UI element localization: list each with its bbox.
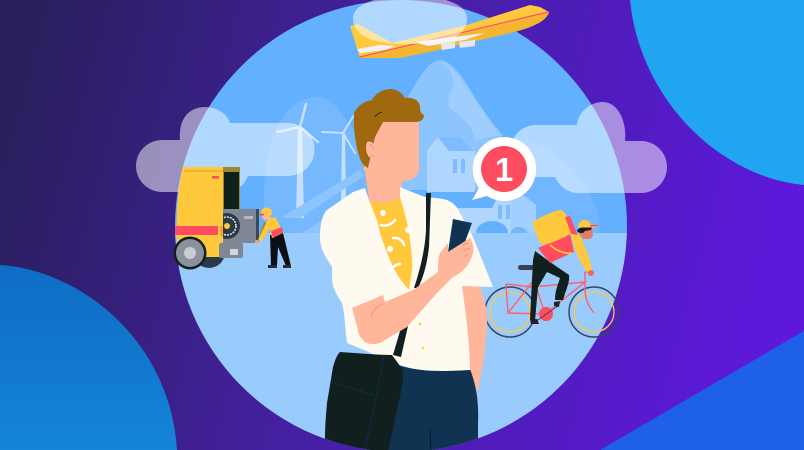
trousers: [385, 365, 478, 450]
bicycle saddle and chainring: [518, 265, 558, 322]
plane belly shade: [360, 13, 548, 58]
worker back arm: [259, 222, 268, 238]
worker legs: [270, 233, 291, 266]
blob: bottom right: [600, 331, 804, 450]
cyclist torso: [538, 234, 574, 263]
cyclist arm: [571, 234, 592, 272]
forearm and hand: [352, 238, 473, 344]
wind turbine left: [277, 104, 318, 218]
right hill: [510, 177, 600, 233]
hill behind wind turbines: [264, 97, 375, 233]
cloud: left: [136, 107, 314, 192]
spare tyre: [214, 213, 240, 239]
worker arm: [258, 217, 274, 241]
truck door frame: [222, 167, 240, 210]
delivery worker: [255, 207, 291, 268]
ground: [175, 233, 627, 450]
mountain swirl: [440, 62, 500, 140]
cloud: right: [510, 102, 667, 193]
cargo box: [222, 209, 258, 243]
house right: [458, 196, 536, 233]
hair: [354, 89, 424, 168]
plane engines: [441, 40, 475, 50]
badge bubble: [472, 137, 536, 201]
bicycle frame: [506, 272, 594, 314]
worker cap: [261, 207, 272, 215]
rear bicycle wheel: [485, 287, 535, 337]
sky: [175, 0, 627, 234]
face: [363, 122, 419, 182]
mountain: [395, 60, 503, 190]
person: [320, 89, 493, 450]
eyebrow mark: [375, 112, 382, 117]
plane fuselage: [350, 5, 549, 58]
truck body: [177, 167, 223, 257]
truck door interior: [224, 172, 239, 210]
cloud: top: [353, 0, 467, 44]
phone: [448, 219, 472, 252]
plane main wing: [415, 33, 485, 46]
front wheel: [174, 236, 206, 270]
yellow undershirt: [369, 197, 412, 290]
shoulder bag: [325, 352, 403, 450]
ear: [366, 142, 375, 158]
cyclist: [485, 210, 619, 337]
neck: [364, 164, 402, 203]
right arm: [462, 285, 487, 393]
cyclist cap: [578, 220, 598, 228]
bumper: [219, 243, 243, 258]
shirt buttons: [419, 323, 424, 349]
blob: top right: [630, 0, 804, 185]
delivery truck: [174, 167, 259, 270]
bag strap: [393, 193, 431, 357]
plane stripe: [360, 12, 548, 57]
badge number: 1: [495, 151, 513, 188]
plane tail wing: [357, 45, 395, 53]
blob: bottom left: [0, 265, 177, 450]
truck red stripe: [175, 226, 218, 235]
worker head: [262, 212, 270, 220]
delivery backpack: [533, 210, 578, 253]
cyclist legs: [530, 251, 569, 320]
house left: [427, 137, 475, 192]
bridge arcs: [280, 170, 364, 233]
cyclist head: [579, 228, 593, 239]
badge disc: [481, 146, 527, 192]
notification badge: [472, 137, 536, 201]
scene circle: [175, 0, 627, 450]
wind turbine right: [322, 115, 355, 200]
worker torso: [267, 217, 283, 238]
airplane: [350, 5, 549, 58]
rear wheel: [193, 236, 225, 268]
cyclist shoes: [530, 301, 560, 324]
front bicycle wheel: [569, 287, 619, 337]
worker shoes: [268, 265, 291, 268]
shirt: [320, 187, 493, 371]
